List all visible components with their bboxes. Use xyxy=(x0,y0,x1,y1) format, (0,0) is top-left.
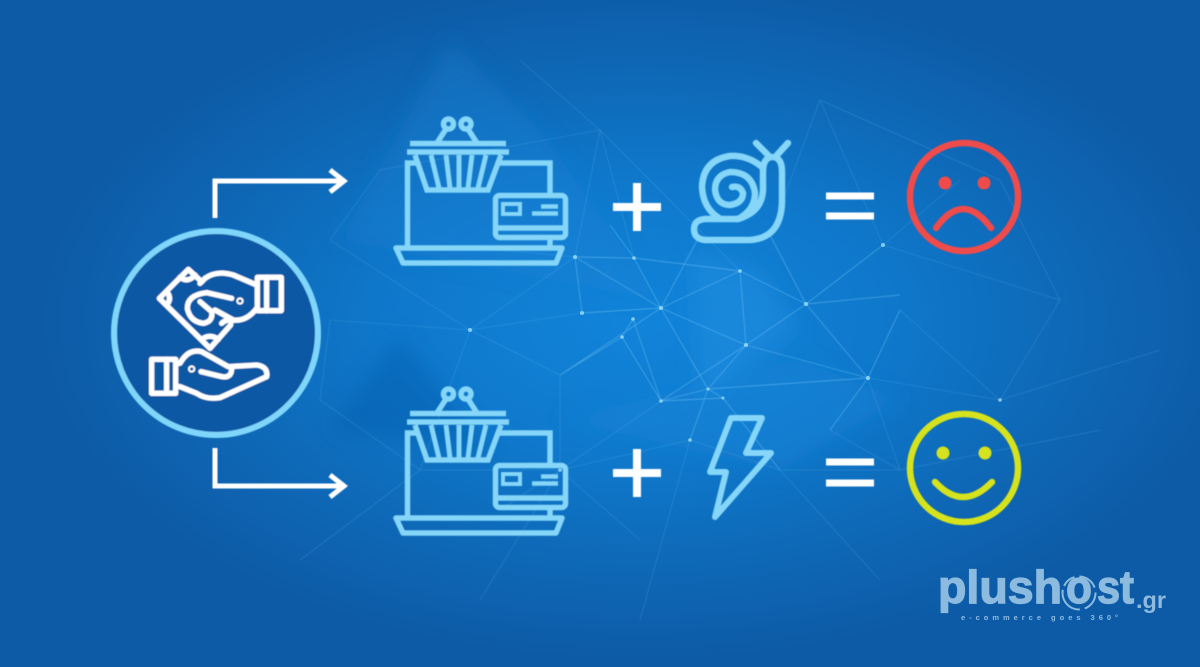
plus sign, top xyxy=(613,183,661,231)
icon: sad face xyxy=(910,143,1018,251)
logo tagline: e-commerce goes 360° xyxy=(961,613,1118,622)
arrow: bottom branch xyxy=(215,448,344,497)
logo wordmark: st xyxy=(1097,561,1134,613)
logo domain: .gr xyxy=(1136,587,1166,613)
arrow: top branch xyxy=(215,170,344,218)
hands xyxy=(152,269,281,398)
logo wordmark: plush xyxy=(938,561,1062,613)
logo xyxy=(938,561,1166,622)
icon: shop basket and card, top xyxy=(396,119,566,263)
logo ring xyxy=(1062,576,1096,610)
logo wordmark: o xyxy=(1066,561,1092,613)
icon: hands exchanging money xyxy=(114,231,318,435)
icon: lightning bolt xyxy=(710,418,771,517)
icon: snail xyxy=(694,143,788,240)
plus sign, bottom xyxy=(613,449,661,497)
circle xyxy=(114,231,318,435)
icon: happy face xyxy=(910,414,1018,522)
icon: shop basket and card, bottom xyxy=(396,389,566,533)
equals sign, top xyxy=(826,196,874,216)
equals sign, bottom xyxy=(826,462,874,483)
